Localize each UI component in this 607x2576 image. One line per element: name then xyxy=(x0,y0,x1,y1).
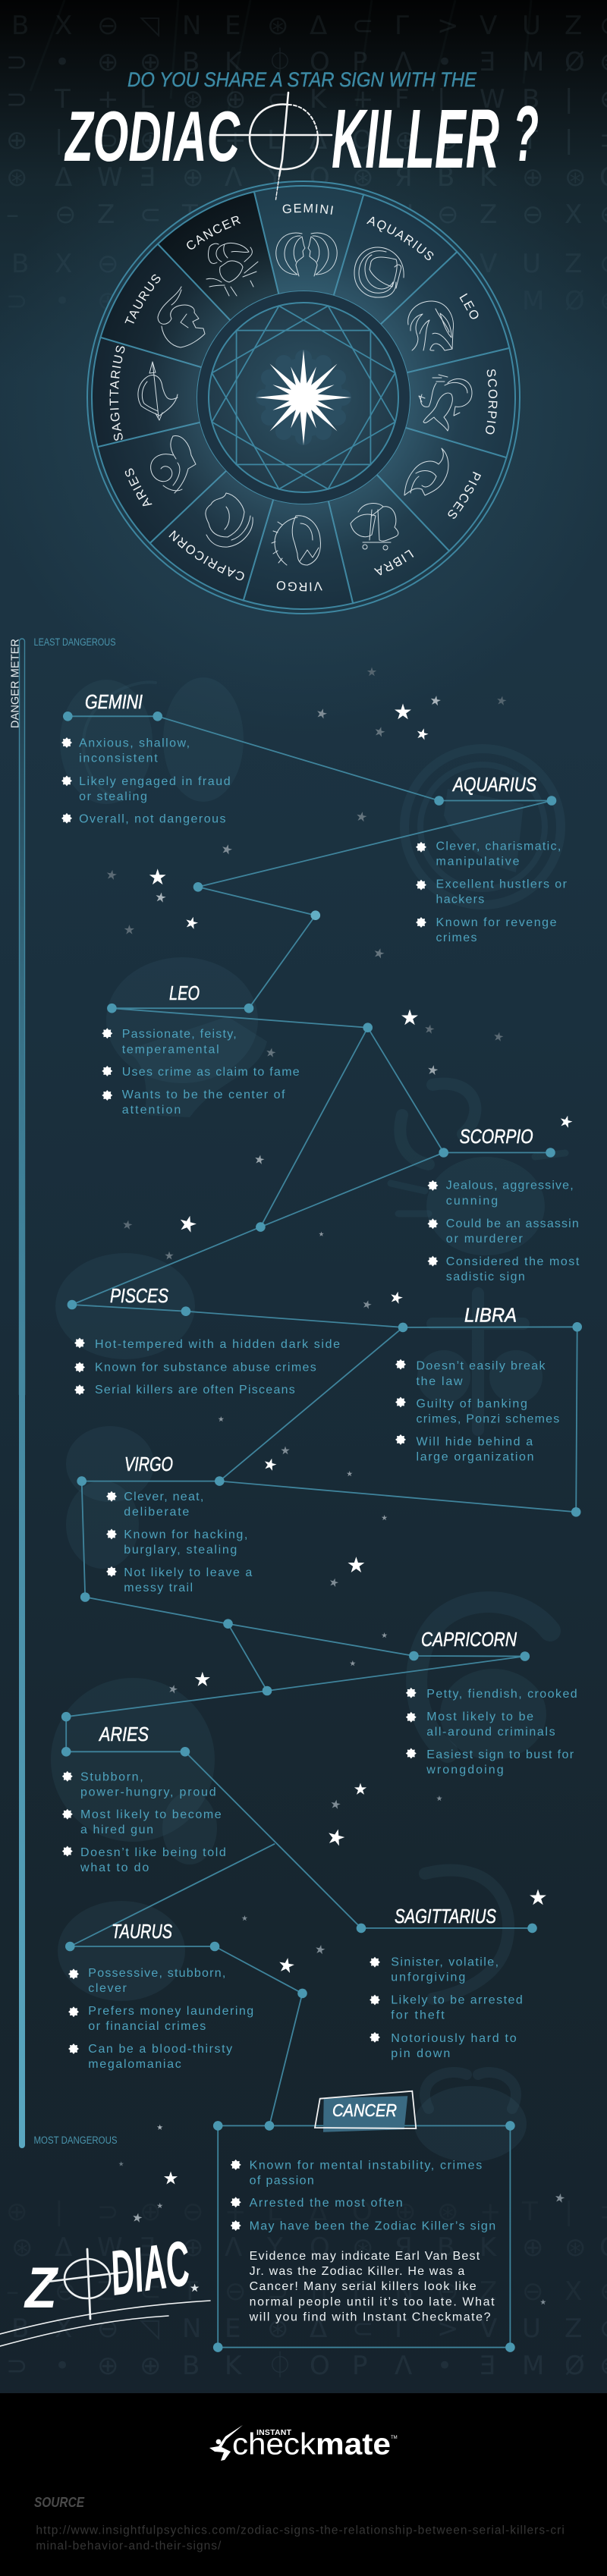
heading: pisces: PISCES xyxy=(110,1284,169,1307)
panel: capricorn xyxy=(406,1628,577,1776)
traits: cancer: Arrested the most often xyxy=(250,2197,403,2210)
outer ring xyxy=(87,181,520,614)
traits: aries: Stubborn, xyxy=(80,1770,143,1783)
panel: aquarius xyxy=(416,773,568,944)
logo word instant: INSTANT xyxy=(256,2428,292,2437)
traits: scorpio: or murderer xyxy=(446,1233,523,1246)
meter bar xyxy=(19,639,25,2148)
traits: sagittarius: pin down xyxy=(391,2047,450,2060)
closing paragraph: Cancer! Many serial killers look like xyxy=(250,2280,476,2293)
traits: libra: Doesn’t easily break xyxy=(416,1360,546,1373)
traits: taurus: or financial crimes xyxy=(88,2020,206,2033)
cipher symbols background bottom: ⊕|⊃⊕⊖+LΔO⊕⊛+T|⊃ xyxy=(6,2197,607,2227)
cipher symbols background top: BX⊖◹NE⊛Δ⊂Γ>VUZ⊙ xyxy=(11,249,607,279)
wheel labels: PISCES xyxy=(448,472,481,519)
traits: aries: what to do xyxy=(80,1861,149,1874)
wheel labels: LIBRA xyxy=(373,549,414,575)
panel: sagittarius xyxy=(370,1905,523,2060)
constellation nodes xyxy=(61,712,582,1998)
closing paragraph: normal people until it’s too late. What xyxy=(250,2295,495,2308)
traits: virgo xyxy=(106,1491,252,1594)
title: zodiac killer xyxy=(64,90,539,199)
wheel labels: VIRGO xyxy=(276,581,322,592)
traits: scorpio xyxy=(427,1180,580,1283)
traits: libra: crimes, Ponzi schemes xyxy=(416,1413,559,1426)
traits: sagittarius: for theft xyxy=(391,2009,445,2022)
traits: aries: a hired gun xyxy=(80,1824,153,1836)
source url: http://www.insightfulpsychics.com/zodiac-signs-the-relationship-between-serial-killers-cri xyxy=(36,2524,565,2537)
cipher symbols background bottom xyxy=(6,2197,607,2381)
traits: sagittarius: unforgiving xyxy=(391,1971,465,1984)
ghost: libra xyxy=(417,1293,543,1430)
cipher symbols background bottom: ⊛ΔWƎ⊕ΛYO⊛ЯBK⊕⊛O xyxy=(11,2232,607,2263)
heading: gemini: GEMINI xyxy=(85,690,143,713)
traits: taurus xyxy=(68,1967,253,2071)
ghost sign artwork xyxy=(51,677,565,2162)
icon: libra xyxy=(351,504,398,550)
ghost: aries xyxy=(51,1678,217,1864)
logo letters diac: DIAC xyxy=(105,2227,194,2309)
panel: virgo xyxy=(106,1453,252,1594)
ghost: leo xyxy=(106,957,267,1117)
traits: taurus: Possessive, stubborn, xyxy=(88,1967,225,1980)
cancer heading tag xyxy=(315,2091,416,2132)
panel: taurus xyxy=(68,1920,253,2071)
trademark: TM xyxy=(391,2436,398,2440)
traits: cancer xyxy=(231,2159,495,2233)
traits: pisces: Serial killers are often Pisceans xyxy=(95,1384,295,1396)
cipher symbols background top xyxy=(6,0,607,316)
brush strokes xyxy=(0,2301,210,2346)
traits: virgo: messy trail xyxy=(124,1582,193,1594)
heading: capricorn: CAPRICORN xyxy=(421,1628,517,1651)
traits: gemini: Anxious, shallow, xyxy=(79,737,190,749)
ghost: aquarius xyxy=(404,749,561,905)
ghost: sagittarius xyxy=(425,1871,508,1999)
wheel labels: LEO xyxy=(460,293,478,319)
wheel labels: AQUARIUS xyxy=(366,217,434,260)
traits: scorpio: cunning xyxy=(446,1195,498,1208)
traits: virgo: burglary, stealing xyxy=(124,1544,237,1557)
traits: taurus: clever xyxy=(88,1982,127,1995)
wheel labels: CANCER xyxy=(187,215,241,250)
heading: aquarius: AQUARIUS xyxy=(451,773,537,796)
ghost: taurus xyxy=(58,1901,185,2001)
traits: cancer: of passion xyxy=(250,2174,314,2187)
ghost: scorpio xyxy=(391,1084,565,1255)
panel: leo xyxy=(102,982,300,1117)
cipher symbols background top: –⊖Z⊂T⊖⊃∩ΓN⊖Z⊖X⊕ xyxy=(6,199,607,230)
traits: libra: Will hide behind a xyxy=(416,1435,533,1449)
traits: capricorn: all-around criminals xyxy=(426,1726,555,1739)
logo letter z: Z xyxy=(24,2256,58,2320)
danger meter xyxy=(9,636,117,2148)
wheel segments xyxy=(90,184,517,611)
icon: scorpio xyxy=(419,375,472,431)
icon: sagittarius xyxy=(138,362,178,420)
logo crosshair xyxy=(48,2249,127,2319)
ghost: pisces xyxy=(55,1253,195,1359)
source heading: SOURCE xyxy=(34,2495,85,2510)
wheel labels: ARIES xyxy=(124,469,153,507)
icon: capricorn xyxy=(206,493,253,547)
cipher symbols background bottom: BX⊖◹NE⊛Δ⊂Γ>VUZ⊙ xyxy=(11,2314,607,2344)
cipher symbols background top: ⊃•⊕⊕BK⏀OPΛ•ƎMØ⊛ xyxy=(6,286,607,316)
traits: pisces: Hot-tempered with a hidden dark side xyxy=(95,1338,340,1351)
traits: aquarius: Excellent hustlers or xyxy=(436,878,568,891)
panel: pisces xyxy=(74,1284,340,1396)
traits: pisces xyxy=(74,1338,340,1396)
traits: gemini: Likely engaged in fraud xyxy=(79,775,231,788)
background stars xyxy=(105,668,574,2304)
wheel labels: TAURUS xyxy=(124,275,161,323)
title question mark: ? xyxy=(513,90,539,178)
closing paragraph: will you find with Instant Checkmate? xyxy=(249,2311,491,2323)
traits: leo: temperamental xyxy=(122,1043,219,1056)
ghost: cancer xyxy=(414,2072,527,2162)
traits: scorpio: sadistic sign xyxy=(446,1271,525,1283)
heading: taurus: TAURUS xyxy=(112,1920,172,1943)
traits: aquarius: Known for revenge xyxy=(436,916,557,929)
panel: aries xyxy=(62,1723,226,1874)
footer band xyxy=(0,2393,607,2576)
traits: capricorn xyxy=(406,1688,577,1776)
traits: leo xyxy=(102,1028,300,1117)
heading: leo: LEO xyxy=(169,982,200,1004)
traits: taurus: megalomaniac xyxy=(88,2058,181,2071)
inner hub xyxy=(197,291,410,504)
traits: scorpio: Could be an assassin xyxy=(446,1217,579,1230)
logo word check: check xyxy=(232,2427,316,2461)
cipher symbols background bottom: ⊃•⊕⊕BK⏀OPΛ•ƎMØ⊛ xyxy=(6,2351,607,2381)
cipher symbols background top: ⊛ΔWƎ⊕ΛYO⊛ЯBK⊕⊛O xyxy=(6,162,607,193)
traits: virgo: Known for hacking, xyxy=(124,1528,247,1541)
icon: aquarius xyxy=(354,247,404,297)
heading: virgo: VIRGO xyxy=(124,1453,173,1475)
checkmate logo xyxy=(209,2425,398,2461)
traits: gemini: or stealing xyxy=(79,790,147,803)
constellation lines xyxy=(66,716,577,2125)
icon: leo xyxy=(408,301,454,350)
traits: gemini: inconsistent xyxy=(79,752,158,765)
traits: capricorn: Most likely to be xyxy=(426,1711,533,1723)
most dangerous label: MOST DANGEROUS xyxy=(33,2135,117,2146)
traits: cancer: May have been the Zodiac Killer’s sign xyxy=(250,2220,495,2233)
wheel labels: CAPRICORN xyxy=(168,530,244,580)
zodiac logo xyxy=(0,2227,210,2346)
heading: aries: ARIES xyxy=(98,1723,149,1745)
cipher symbols background top: ⊕|⊃⊕⊖+LΔO⊕⊛+T|⊃ xyxy=(6,125,607,156)
traits: aries: power-hungry, proud xyxy=(80,1786,216,1798)
wheel labels xyxy=(109,176,498,592)
cipher symbols background bottom: –⊖Z⊂T⊖⊃∩ΓN⊖Z⊖X⊕ xyxy=(6,2276,607,2307)
title word: zodiac: ZODIAC xyxy=(64,96,241,176)
closing paragraph xyxy=(249,2250,495,2323)
traits: scorpio: Considered the most xyxy=(446,1255,580,1268)
traits: leo: Uses crime as claim to fame xyxy=(122,1066,300,1079)
wheel of zodiac signs xyxy=(86,181,521,614)
ghost: virgo xyxy=(66,1426,154,1569)
icon: pisces xyxy=(404,448,448,495)
logo word mate: mate xyxy=(316,2427,391,2461)
heading: scorpio: SCORPIO xyxy=(460,1125,533,1148)
traits: leo: Wants to be the center of xyxy=(122,1089,285,1101)
traits: sagittarius xyxy=(370,1956,523,2060)
icon: gemini xyxy=(276,233,337,276)
closing paragraph: Evidence may indicate Earl Van Best xyxy=(250,2250,480,2263)
icon: crosshair xyxy=(216,93,332,199)
traits: libra: large organization xyxy=(416,1450,534,1464)
traits: leo: Passionate, feisty, xyxy=(122,1028,237,1041)
traits: aquarius: crimes xyxy=(436,931,476,944)
source url xyxy=(36,2524,565,2552)
traits: virgo: deliberate xyxy=(124,1506,189,1519)
cipher symbols background top: ⊃T+L⊛⊕⊂K+F|WB|⊖ xyxy=(6,84,607,115)
wheel labels: GEMINI xyxy=(282,203,333,215)
cancer heading tag: CANCER xyxy=(332,2100,397,2120)
source xyxy=(34,2495,565,2552)
traits: scorpio: Jealous, aggressive, xyxy=(446,1180,574,1192)
traits: capricorn: wrongdoing xyxy=(426,1764,504,1776)
panel: cancer xyxy=(213,2091,515,2352)
traits: libra: Guilty of banking xyxy=(416,1398,527,1411)
traits: gemini xyxy=(61,737,231,826)
traits: libra: the law xyxy=(416,1375,463,1388)
least dangerous label: LEAST DANGEROUS xyxy=(33,636,115,648)
traits: sagittarius: Sinister, volatile, xyxy=(391,1956,498,1969)
closing paragraph: Jr. was the Zodiac Killer. He was a xyxy=(250,2265,464,2278)
traits: aquarius: hackers xyxy=(436,893,484,906)
panel: scorpio xyxy=(427,1125,580,1283)
traits: sagittarius: Notoriously hard to xyxy=(391,2032,517,2045)
meter title: DANGER METER xyxy=(9,639,21,728)
traits: pisces: Known for substance abuse crimes xyxy=(95,1361,316,1374)
icon: cancer xyxy=(206,243,258,296)
icon: taurus xyxy=(158,287,205,347)
traits: virgo: Not likely to leave a xyxy=(124,1566,252,1579)
wheel labels: SAGITTARIUS xyxy=(109,346,124,441)
panel: libra xyxy=(395,1303,559,1464)
ghost: gemini xyxy=(60,677,244,804)
heading: subtitle: DO YOU SHARE A STAR SIGN WITH THE xyxy=(127,68,477,91)
traits: sagittarius: Likely to be arrested xyxy=(391,1993,523,2006)
traits: aries xyxy=(62,1770,226,1874)
traits: taurus: Prefers money laundering xyxy=(88,2005,253,2018)
icon: virgo xyxy=(272,516,320,565)
cipher symbols background top: ⊃•⊕⊕BK⏀OPΛ•ƎMØ⊛ xyxy=(6,47,607,77)
centre star xyxy=(256,350,351,445)
traits: leo: attention xyxy=(122,1104,181,1117)
traits: cancer: Known for mental instability, crimes xyxy=(250,2159,482,2172)
traits: gemini: Overall, not dangerous xyxy=(79,813,225,826)
icon: aries xyxy=(151,436,196,493)
traits: aquarius xyxy=(416,840,568,944)
traits: virgo: Clever, neat, xyxy=(124,1491,203,1503)
source url: minal-behavior-and-their-signs/ xyxy=(36,2540,222,2552)
traits: aries: Most likely to become xyxy=(80,1808,222,1821)
traits: aquarius: Clever, charismatic, xyxy=(436,840,561,853)
heading: libra: LIBRA xyxy=(464,1303,517,1326)
traits: capricorn: Petty, fiendish, crooked xyxy=(426,1688,577,1701)
ghost: capricorn xyxy=(417,1602,550,1760)
traits: aquarius: manipulative xyxy=(436,856,520,869)
cipher symbols background top: BX⊖◹NE⊛Δ⊂Γ>VUZ⊙ xyxy=(11,11,607,41)
wheel labels: SCORPIO xyxy=(486,369,498,434)
traits: taurus: Can be a blood-thirsty xyxy=(88,2043,232,2056)
panel: gemini xyxy=(61,690,231,826)
traits: aries: Doesn’t like being told xyxy=(80,1846,226,1859)
traits: capricorn: Easiest sign to bust for xyxy=(426,1748,574,1761)
icon: checkmark figure xyxy=(209,2425,243,2461)
traits: libra xyxy=(395,1359,559,1464)
cancer box frame xyxy=(213,2121,515,2352)
wheel glow xyxy=(0,76,607,743)
heading: sagittarius: SAGITTARIUS xyxy=(395,1905,497,1927)
